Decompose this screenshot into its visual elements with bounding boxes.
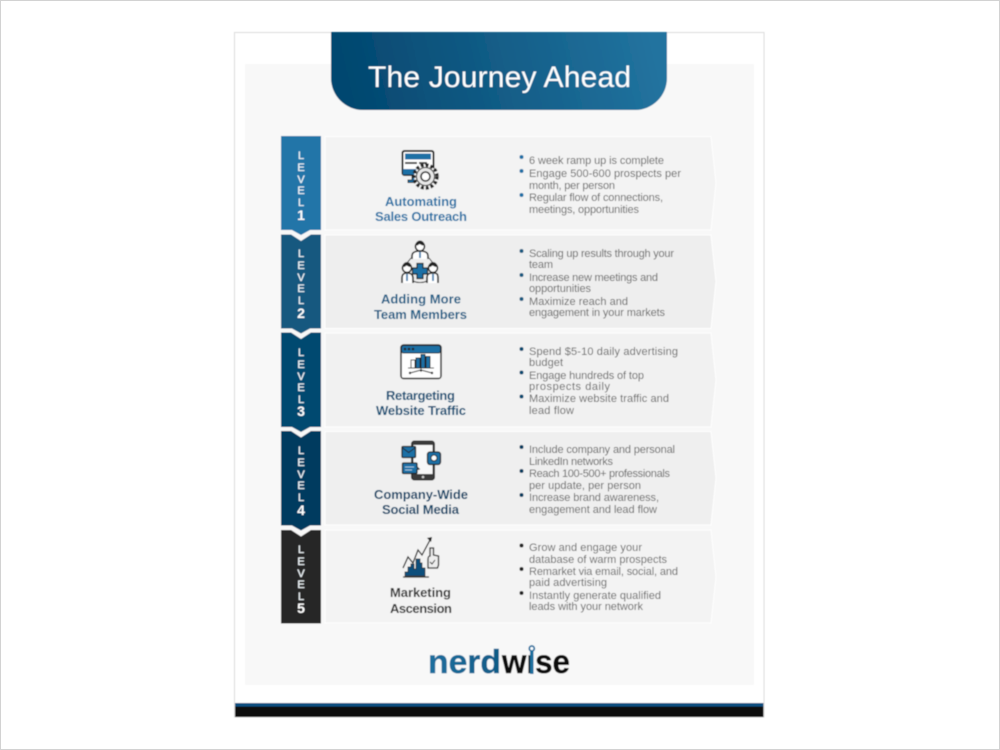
level 3 tab: L bbox=[298, 394, 304, 406]
heading: company-wide social media: Social Media bbox=[382, 502, 460, 517]
level 2 tab bbox=[281, 234, 321, 334]
heading: adding more team members: Team Members bbox=[374, 307, 467, 322]
bullet list level 3: budget bbox=[529, 357, 563, 369]
level 4 panel bbox=[325, 432, 716, 525]
bullet list level 2: Scaling up results through your bbox=[529, 248, 674, 260]
icon: phone with messages bbox=[402, 441, 440, 480]
heading: automating sales outreach: Automating bbox=[385, 194, 457, 209]
icon: growth chart and hand bbox=[403, 537, 438, 577]
bullet list level 3: Maximize website traffic and bbox=[529, 393, 669, 405]
title banner bbox=[331, 32, 667, 110]
level 1 tab: 1 bbox=[297, 207, 305, 223]
bullet list level 5: Grow and engage your bbox=[529, 542, 642, 554]
heading: adding more team members: Adding More bbox=[381, 292, 461, 306]
level 4 row bbox=[281, 431, 716, 530]
bullet list level 4: Include company and personal bbox=[529, 444, 675, 456]
heading: retargeting website traffic bbox=[376, 388, 466, 418]
bullet list level 1 bbox=[520, 155, 681, 216]
level 1 tab: L bbox=[298, 197, 304, 209]
bullet list level 4: LinkedIn networks bbox=[529, 456, 614, 468]
bullet list level 1: Regular flow of connections, bbox=[529, 192, 663, 204]
level 1 tab: L bbox=[298, 150, 304, 162]
level 3 row bbox=[281, 332, 716, 432]
background panel bbox=[245, 64, 754, 685]
bullet list level 5: Instantly generate qualified bbox=[529, 590, 661, 602]
level 1 panel bbox=[325, 136, 716, 230]
level 5 tab: V bbox=[297, 568, 305, 580]
heading: marketing ascension bbox=[390, 585, 452, 616]
bullet list level 4: per update, per person bbox=[529, 480, 641, 492]
level 3 tab: 3 bbox=[297, 403, 305, 419]
level 3 tab bbox=[281, 332, 321, 432]
level 5 tab: L bbox=[298, 591, 304, 603]
level 3 tab: V bbox=[297, 371, 305, 383]
level 1 tab: E bbox=[297, 185, 305, 197]
level 4 tab: E bbox=[297, 457, 305, 469]
bullet list level 2: Increase new meetings and bbox=[529, 272, 658, 284]
bullet list level 5 bbox=[520, 542, 678, 613]
bullet list level 4: Reach 100-500+ professionals bbox=[529, 468, 670, 480]
level 2 panel bbox=[325, 235, 716, 328]
title: The Journey Ahead bbox=[368, 61, 631, 94]
level 5 row bbox=[281, 530, 716, 624]
level 2 tab: E bbox=[297, 283, 305, 295]
bullet list level 3: lead flow bbox=[529, 405, 574, 417]
level 5 tab: 5 bbox=[297, 600, 305, 616]
bullet list level 2: team bbox=[529, 259, 553, 271]
level 5 tab bbox=[281, 530, 321, 624]
level 3 panel bbox=[325, 333, 716, 427]
heading: retargeting website traffic: Website Traffic bbox=[376, 403, 466, 418]
level 2 tab: E bbox=[297, 260, 305, 272]
level 1 tab: E bbox=[297, 162, 305, 174]
level 3 tab: L bbox=[298, 347, 304, 359]
icon: monitor and gear bbox=[402, 151, 437, 188]
logo: nerdwise: nerd bbox=[428, 643, 501, 680]
bullet list level 5: leads with your network bbox=[529, 601, 644, 613]
logo: nerdwise: wise bbox=[501, 643, 570, 680]
level 1 tab: V bbox=[297, 174, 305, 186]
bullet list level 1: month, per person bbox=[529, 180, 615, 192]
level 5 panel bbox=[325, 530, 716, 623]
bullet list level 3 bbox=[520, 346, 678, 417]
level 5 tab: E bbox=[297, 579, 305, 591]
level 4 tab bbox=[281, 431, 321, 530]
heading: marketing ascension: Marketing bbox=[390, 585, 451, 600]
bullet list level 2: Maximize reach and bbox=[529, 296, 628, 308]
icon: browser chart bbox=[401, 345, 441, 378]
level 2 tab: L bbox=[298, 295, 304, 307]
bullet list level 1: 6 week ramp up is complete bbox=[529, 155, 664, 167]
bullet list level 1: Engage 500-600 prospects per bbox=[529, 168, 681, 180]
bullet list level 5: Remarket via email, social, and bbox=[529, 566, 678, 578]
bullet list level 5: paid advertising bbox=[529, 577, 607, 589]
level 1 tab bbox=[281, 136, 321, 235]
icon: team with plus bbox=[402, 241, 438, 283]
level 5 tab: E bbox=[297, 556, 305, 568]
bullet list level 2: engagement in your markets bbox=[529, 307, 666, 319]
bullet list level 3: Spend $5-10 daily advertising bbox=[529, 346, 678, 358]
heading: automating sales outreach: Sales Outreach bbox=[375, 209, 467, 224]
level 4 tab: 4 bbox=[297, 502, 305, 518]
bullet list level 1: meetings, opportunities bbox=[529, 204, 640, 216]
bullet list level 3: prospects daily bbox=[529, 381, 610, 393]
heading: adding more team members bbox=[374, 292, 467, 322]
heading: company-wide social media bbox=[374, 487, 468, 517]
level 2 row bbox=[281, 234, 716, 334]
heading: company-wide social media: Company-Wide bbox=[374, 487, 468, 502]
level 1 row bbox=[281, 136, 716, 235]
bullet list level 4 bbox=[520, 444, 675, 516]
bullet list level 4: engagement and lead flow bbox=[529, 504, 657, 516]
logo: nerdwise bbox=[428, 643, 570, 680]
level 2 tab: L bbox=[298, 248, 304, 260]
level 2 tab: V bbox=[297, 272, 305, 284]
level 4 tab: L bbox=[298, 492, 304, 504]
heading: retargeting website traffic: Retargeting bbox=[386, 388, 455, 403]
level 3 tab: E bbox=[297, 359, 305, 371]
bullet list level 2: opportunities bbox=[529, 283, 592, 295]
heading: automating sales outreach bbox=[375, 194, 467, 224]
level 4 tab: E bbox=[297, 480, 305, 492]
level 5 tab: L bbox=[298, 544, 304, 556]
bullet list level 3: Engage hundreds of top bbox=[529, 370, 644, 382]
heading: marketing ascension: Ascension bbox=[390, 601, 452, 616]
level 2 tab: 2 bbox=[297, 305, 305, 321]
level 4 tab: L bbox=[298, 445, 304, 457]
bullet list level 2 bbox=[520, 248, 674, 319]
bullet list level 5: database of warm prospects bbox=[529, 554, 668, 566]
bullet list level 4: Increase brand awareness, bbox=[529, 492, 659, 504]
footer bar bbox=[235, 703, 764, 717]
level 4 tab: V bbox=[297, 469, 305, 481]
level 3 tab: E bbox=[297, 382, 305, 394]
page sheet bbox=[234, 32, 764, 717]
